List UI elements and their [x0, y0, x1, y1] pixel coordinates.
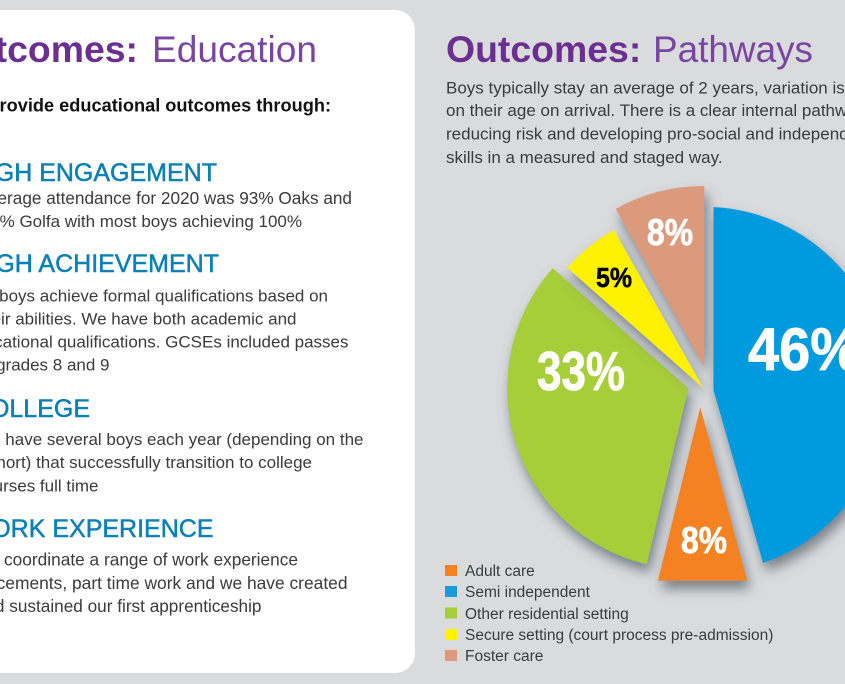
title: outcomes pathways: Pathways: [653, 28, 813, 70]
slice: adult care 8%: [658, 407, 747, 581]
legend item: adult care: Adult care: [465, 563, 535, 580]
legend item: foster care: Foster care: [465, 648, 543, 665]
pathways description: skills in a measured and staged way.: [446, 148, 723, 167]
label: 33%: 33%: [537, 340, 625, 402]
section: high achievement: [0, 250, 348, 374]
slice: other residential setting 33%: [507, 268, 688, 564]
title: outcomes education: [0, 28, 317, 70]
section: work experience: [0, 515, 348, 616]
panel: education: [0, 10, 415, 673]
title: outcomes pathways: Outcomes:: [446, 28, 641, 70]
slice: secure setting 5%: [567, 230, 703, 388]
pie chart: [507, 186, 845, 581]
label: tan 8%: 8%: [647, 212, 693, 253]
legend item: semi independent: Semi independent: [465, 584, 591, 601]
title: outcomes pathways: [446, 28, 813, 70]
legend item: other residential setting: Other residential setting: [465, 606, 629, 623]
section: college: [0, 395, 364, 496]
pathways description: [446, 78, 845, 167]
legend: [445, 563, 773, 665]
legend item: secure setting: Secure setting (court process pre-admission): [465, 627, 773, 644]
label: orange 8%: 8%: [681, 520, 727, 561]
label: 5%: 5%: [596, 262, 632, 293]
slice: semi independent 46%: [714, 207, 845, 563]
slice: foster care 8%: [616, 186, 704, 367]
section: high engagement: [0, 159, 352, 231]
title: outcomes education: Education: [152, 28, 317, 70]
